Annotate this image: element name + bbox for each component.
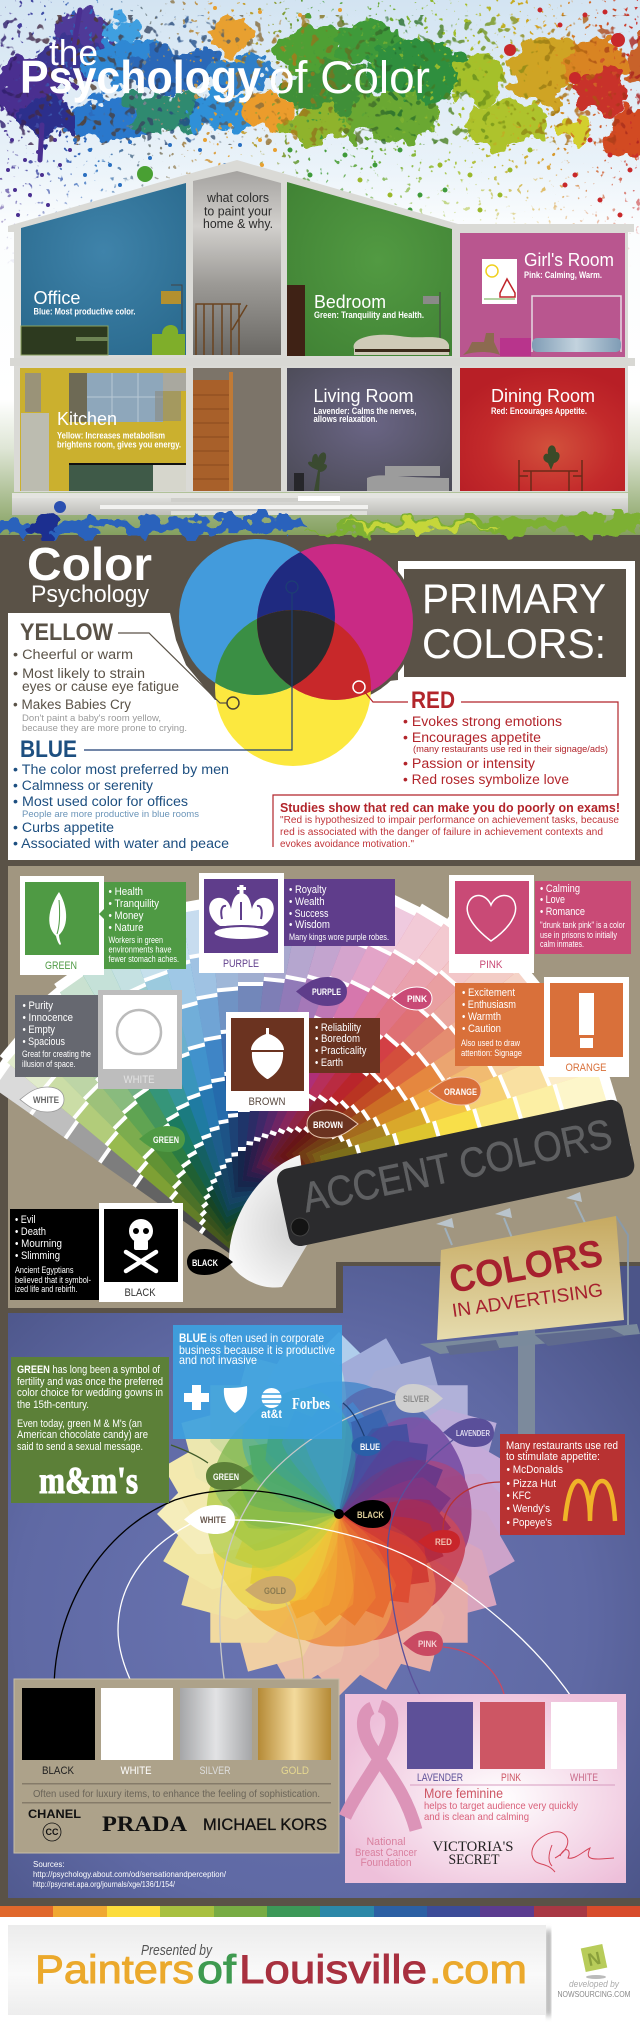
yellow text block: • Most likely to strain bbox=[13, 666, 145, 681]
card: black: • Evil bbox=[15, 1214, 36, 1226]
fan tag: purple bbox=[296, 977, 347, 1006]
yellow text block: because they are more prone to crying. bbox=[22, 723, 187, 733]
card: purple: • Wisdom bbox=[289, 919, 330, 931]
blue text block: People are more productive in blue rooms bbox=[22, 809, 200, 819]
feminine colors panel: WHITE bbox=[570, 1772, 598, 1784]
feminine colors panel: Breast Cancer bbox=[355, 1847, 417, 1859]
green fertility box: m&m's bbox=[39, 1460, 138, 1502]
card: pink bbox=[449, 875, 631, 973]
sources bbox=[33, 1860, 227, 1889]
room: upper hallway with intro text: home & why. bbox=[203, 216, 273, 231]
card: orange: • Excitement bbox=[462, 987, 515, 999]
house foundation and steps bbox=[12, 493, 628, 515]
green fertility box bbox=[11, 1357, 169, 1503]
luxury colors panel: MICHAEL KORS bbox=[203, 1815, 327, 1834]
room: living room: Lavender: Calms the nerves, bbox=[314, 406, 416, 416]
card: pink: PINK bbox=[480, 959, 503, 971]
flower tag: red bbox=[418, 1530, 460, 1553]
room: office bbox=[21, 183, 186, 355]
fan tag: purple: PURPLE bbox=[312, 987, 341, 997]
footer presenter banner: of bbox=[197, 1948, 237, 1992]
developer logo: N bbox=[586, 1948, 603, 1970]
footer presenter banner: Presented by bbox=[141, 1942, 213, 1959]
card: green bbox=[20, 876, 186, 975]
blue text block: BLUE bbox=[20, 736, 77, 763]
green fertility box: color choice for wedding gowns in bbox=[17, 1387, 163, 1399]
room: office: Office bbox=[34, 288, 80, 308]
room: kitchen: Kitchen bbox=[57, 409, 117, 429]
flower tag: black with center dot: BLACK bbox=[357, 1510, 384, 1520]
card: purple: • Royalty bbox=[289, 884, 327, 896]
footer presenter banner: .com bbox=[429, 1948, 527, 1992]
card: white bbox=[15, 990, 182, 1089]
room: bedroom: Bedroom bbox=[314, 292, 386, 312]
luxury colors panel: CC bbox=[46, 1827, 59, 1837]
red exam study callout: evokes avoidance motivation." bbox=[280, 839, 414, 850]
card: orange bbox=[455, 977, 629, 1077]
room: living room: Living Room bbox=[314, 386, 414, 406]
color flower bbox=[153, 1328, 525, 1700]
blue text block: • The color most preferred by men bbox=[13, 762, 229, 777]
luxury colors panel: Often used for luxury items, to enhance the feeling of sophistication. bbox=[33, 1788, 320, 1800]
card: green: • Nature bbox=[108, 922, 144, 934]
flower tag: silver: SILVER bbox=[403, 1394, 429, 1404]
card: white: • Purity bbox=[22, 1000, 53, 1012]
flower tag: green bbox=[206, 1462, 254, 1490]
red text block: • Evokes strong emotions bbox=[403, 714, 562, 729]
feminine colors panel: National bbox=[366, 1836, 406, 1848]
primary colors heading box bbox=[404, 569, 626, 677]
card: orange: • Caution bbox=[462, 1023, 501, 1035]
tan accent section background bbox=[8, 866, 640, 1308]
floor slab bbox=[10, 358, 635, 366]
card: green: GREEN bbox=[45, 960, 77, 972]
title: Psychology bbox=[20, 51, 261, 103]
paint strokes on the ground bbox=[0, 512, 640, 538]
card: orange: ORANGE bbox=[566, 1062, 606, 1074]
flower tag: white bbox=[184, 1505, 235, 1534]
sources: http://psycnet.apa.org/journals/xge/136/1/154/ bbox=[33, 1880, 176, 1889]
room: office: Blue: Most productive color. bbox=[34, 306, 136, 316]
fan tag: pink: PINK bbox=[407, 994, 427, 1004]
card: purple bbox=[199, 873, 395, 973]
blue text block: • Calmness or serenity bbox=[13, 778, 153, 793]
title: of Color bbox=[269, 52, 430, 103]
blue advertising section background bbox=[8, 1266, 640, 1898]
fan tag: orange: ORANGE bbox=[444, 1087, 477, 1097]
room: upper hallway with intro text bbox=[193, 171, 281, 355]
room: dining room: Dining Room bbox=[491, 386, 595, 406]
footer presenter banner bbox=[8, 1925, 551, 2016]
luxury colors panel: GOLD bbox=[281, 1765, 309, 1777]
card: orange: attention: Signage bbox=[461, 1048, 522, 1058]
flower tag: gold bbox=[245, 1576, 296, 1604]
blue corporate box: at&t bbox=[261, 1407, 282, 1421]
card: white: • Innocence bbox=[22, 1012, 73, 1024]
green connector bbox=[171, 1445, 208, 1463]
card: green: • Tranquility bbox=[108, 898, 159, 910]
developer logo: developed by bbox=[569, 1979, 619, 1989]
red exam study callout: red is associated with the danger of failure in achievement contexts and bbox=[280, 827, 603, 838]
flower tag: white: WHITE bbox=[200, 1515, 226, 1525]
flower tag: red: RED bbox=[435, 1537, 452, 1547]
card: orange: • Enthusiasm bbox=[462, 999, 516, 1011]
luxury colors panel: WHITE bbox=[120, 1765, 152, 1777]
flower tag: black with center dot bbox=[334, 1500, 391, 1528]
fan tag: green: GREEN bbox=[153, 1135, 179, 1145]
room: kitchen: brightens room, gives you energy. bbox=[57, 440, 181, 450]
card: purple: • Wealth bbox=[289, 896, 324, 908]
room: bedroom: Green: Tranquility and Health. bbox=[314, 310, 424, 320]
blue corporate box bbox=[173, 1325, 342, 1439]
blue corporate box: BLUE is often used in corporate bbox=[179, 1331, 324, 1345]
footer presenter banner: Louisville bbox=[239, 1948, 427, 1992]
brown panel background bbox=[0, 535, 640, 1906]
color psychology heading: Color bbox=[27, 538, 152, 590]
flower tag: lavender bbox=[443, 1418, 494, 1447]
red exam study callout: Studies show that red can make you do poorly on exams! bbox=[280, 800, 620, 815]
yellow text block: YELLOW bbox=[20, 619, 113, 646]
card: brown: • Earth bbox=[315, 1057, 343, 1069]
card: black: • Slimming bbox=[15, 1250, 60, 1262]
luxury colors panel: CHANEL bbox=[28, 1807, 81, 1821]
red restaurants box: • Popeye's bbox=[506, 1517, 552, 1529]
card: green: Workers in green bbox=[108, 935, 163, 945]
billboard pole and platform bbox=[420, 1324, 640, 1435]
room: girl's room: Girl's Room bbox=[524, 250, 614, 270]
room: lower stairs bbox=[193, 368, 281, 491]
title: the bbox=[49, 32, 98, 73]
flower tag: gold: GOLD bbox=[264, 1586, 286, 1596]
card: black: believed that it symbol- bbox=[15, 1275, 91, 1285]
developer logo bbox=[558, 1944, 631, 1999]
connector: red bbox=[273, 681, 618, 847]
yellow text block: eyes or cause eye fatigue bbox=[22, 679, 179, 694]
card: orange: Also used to draw bbox=[461, 1038, 520, 1048]
flower tag: blue: BLUE bbox=[360, 1442, 380, 1452]
card: pink: use in prisons to initially bbox=[540, 930, 617, 940]
card: purple: PURPLE bbox=[223, 958, 259, 970]
colors in advertising billboard: IN ADVERTISING bbox=[451, 1280, 604, 1322]
green fertility box: Even today, green M & M's (an bbox=[17, 1418, 142, 1430]
developer logo: NOWSOURCING.COM bbox=[558, 1990, 631, 1999]
fan tag: black bbox=[187, 1249, 233, 1275]
card: white: illusion of space. bbox=[22, 1059, 76, 1069]
rainbow bar bbox=[0, 1906, 640, 1917]
red restaurants box bbox=[500, 1434, 625, 1535]
green fertility box: the 15th-century. bbox=[17, 1399, 89, 1411]
room: upper hallway with intro text: to paint your bbox=[204, 204, 273, 218]
red text block: (many restaurants use red in their signage/ads) bbox=[413, 744, 608, 754]
card: white: • Empty bbox=[22, 1024, 55, 1036]
flower tag: pink: PINK bbox=[418, 1639, 437, 1649]
card: green: fewer stomach aches. bbox=[108, 954, 179, 964]
feminine colors panel: and is clean and calming bbox=[424, 1811, 529, 1823]
room: girl's room bbox=[460, 233, 625, 357]
feminine colors panel: LAVENDER bbox=[417, 1772, 463, 1784]
red restaurants box: • KFC bbox=[506, 1490, 531, 1502]
card: green: • Money bbox=[108, 910, 144, 922]
card: pink: • Romance bbox=[540, 906, 585, 918]
fan tag: pink bbox=[392, 987, 432, 1010]
blue text block: • Most used color for offices bbox=[13, 794, 188, 809]
primary colors heading box: PRIMARY bbox=[422, 575, 606, 622]
house shell and roof bbox=[8, 160, 634, 492]
card: black: Ancient Egyptians bbox=[15, 1265, 74, 1275]
card: pink: • Calming bbox=[540, 883, 580, 895]
red restaurants box: Many restaurants use red bbox=[506, 1440, 618, 1452]
sky background bbox=[0, 0, 640, 540]
red text block: • Red roses symbolize love bbox=[403, 772, 569, 787]
fan tag: brown: BROWN bbox=[313, 1120, 343, 1130]
red text block: • Encourages appetite bbox=[403, 730, 541, 745]
colors in advertising billboard bbox=[436, 1192, 628, 1340]
footer presenter banner: Painters bbox=[35, 1948, 194, 1992]
title bbox=[20, 32, 430, 103]
red exam study callout bbox=[280, 800, 620, 850]
card: brown: • Practicality bbox=[315, 1045, 367, 1057]
green fertility box: GREEN has long been a symbol of bbox=[17, 1364, 161, 1376]
fan tag: brown bbox=[307, 1110, 358, 1138]
color swatch fan bbox=[0, 881, 631, 1255]
card: black: BLACK bbox=[124, 1287, 156, 1299]
card: white: • Spacious bbox=[22, 1036, 65, 1048]
blue corporate box: Forbes bbox=[292, 1394, 330, 1413]
primary colors heading box: COLORS: bbox=[422, 620, 606, 667]
card: black: • Death bbox=[15, 1226, 46, 1238]
white card bases of the fan bbox=[229, 1155, 310, 1288]
feminine colors panel: Foundation bbox=[360, 1857, 412, 1869]
red restaurants box: • Wendy's bbox=[506, 1503, 550, 1515]
luxury colors panel: BLACK bbox=[42, 1765, 75, 1777]
room: kitchen bbox=[20, 368, 186, 491]
connector: yellow bbox=[118, 633, 239, 709]
sources: Sources: bbox=[33, 1860, 65, 1869]
luxury colors panel bbox=[14, 1679, 339, 1853]
red text block: RED bbox=[411, 687, 455, 714]
blue corporate box: business because it is productive bbox=[179, 1343, 335, 1357]
red restaurants box: to stimulate appetite: bbox=[506, 1451, 600, 1463]
connector: blue bbox=[84, 581, 298, 750]
card: green: • Health bbox=[108, 886, 143, 898]
red exam study callout: "Red is hypothesized to impair performance on achievement tasks, because bbox=[280, 815, 619, 826]
blue text block: • Associated with water and peace bbox=[13, 836, 229, 851]
card: green: environments have bbox=[108, 944, 172, 954]
flower tag: pink bbox=[403, 1631, 443, 1656]
green fertility box: said to send a sexual message. bbox=[17, 1441, 143, 1453]
feminine colors panel: PINK bbox=[501, 1772, 522, 1784]
sources: http://psychology.about.com/od/sensationandperception/ bbox=[33, 1870, 227, 1879]
room: girl's room: Pink: Calming, Warm. bbox=[524, 270, 602, 280]
yellow text block bbox=[13, 619, 187, 733]
room: living room: allows relaxation. bbox=[314, 414, 378, 424]
room: bedroom bbox=[287, 182, 452, 356]
card: brown: • Reliability bbox=[315, 1022, 361, 1034]
fan tag: green bbox=[139, 1126, 185, 1152]
feminine colors panel: More feminine bbox=[424, 1785, 503, 1801]
flower tag: green: GREEN bbox=[213, 1472, 239, 1482]
card: white: Great for creating the bbox=[22, 1049, 91, 1059]
green fertility box: fertility and was once the preferred bbox=[17, 1376, 163, 1388]
room: living room bbox=[287, 368, 452, 491]
feminine colors panel: VICTORIA'S bbox=[432, 1839, 514, 1855]
blue corporate box: and not invasive bbox=[179, 1353, 257, 1367]
feminine colors panel: SECRET bbox=[448, 1852, 500, 1868]
red text block bbox=[403, 687, 608, 787]
flower connector lines bbox=[54, 1400, 575, 1702]
yellow text block: • Makes Babies Cry bbox=[13, 697, 131, 712]
card: brown: • Boredom bbox=[315, 1033, 360, 1045]
flower tag: silver bbox=[395, 1384, 443, 1413]
red restaurants box: • McDonalds bbox=[506, 1464, 563, 1476]
room: dining room bbox=[460, 368, 625, 491]
red restaurants box: • Pizza Hut bbox=[506, 1478, 556, 1490]
fan tag: orange bbox=[429, 1077, 481, 1105]
white text panel bbox=[8, 561, 635, 860]
card: brown bbox=[226, 1012, 380, 1111]
card: black: ized life and rebirth. bbox=[15, 1284, 78, 1294]
card: brown: BROWN bbox=[248, 1096, 286, 1108]
luxury colors panel: PRADA bbox=[102, 1811, 187, 1836]
blue text block bbox=[13, 736, 229, 851]
yellow text block: • Cheerful or warm bbox=[13, 647, 133, 662]
room: kitchen: Yellow: Increases metabolism bbox=[57, 430, 165, 440]
red text block: • Passion or intensity bbox=[403, 756, 535, 771]
fan tag: white bbox=[20, 1087, 64, 1112]
feminine colors panel: helps to target audience very quickly bbox=[424, 1800, 579, 1812]
feminine colors panel bbox=[345, 1694, 626, 1883]
card: pink: calm inmates. bbox=[540, 939, 584, 949]
color psychology heading: Psychology bbox=[31, 581, 149, 608]
blue text block: • Curbs appetite bbox=[13, 820, 114, 835]
fan tag: black: BLACK bbox=[192, 1258, 218, 1268]
card: black bbox=[10, 1203, 183, 1302]
yellow text block: Don't paint a baby's room yellow, bbox=[22, 713, 161, 723]
card: purple: Many kings wore purple robes. bbox=[289, 932, 389, 942]
luxury colors panel: SILVER bbox=[200, 1765, 231, 1777]
paint splatter band bbox=[0, 0, 640, 270]
green fertility box: American chocolate candy) are bbox=[17, 1429, 148, 1441]
flower tag: blue bbox=[352, 1436, 382, 1456]
card: black: • Mourning bbox=[15, 1238, 62, 1250]
room: upper hallway with intro text: what colors bbox=[206, 190, 269, 205]
card: pink: • Love bbox=[540, 894, 565, 906]
fan tag: white: WHITE bbox=[33, 1095, 59, 1105]
card: purple: • Success bbox=[289, 908, 329, 920]
card: white: WHITE bbox=[124, 1074, 154, 1086]
card: orange: • Warmth bbox=[462, 1011, 501, 1023]
colors in advertising billboard: COLORS bbox=[446, 1233, 606, 1302]
flower tag: lavender: LAVENDER bbox=[456, 1429, 490, 1438]
venn diagram of primary colors bbox=[176, 536, 416, 766]
room: dining room: Red: Encourages Appetite. bbox=[491, 406, 587, 416]
